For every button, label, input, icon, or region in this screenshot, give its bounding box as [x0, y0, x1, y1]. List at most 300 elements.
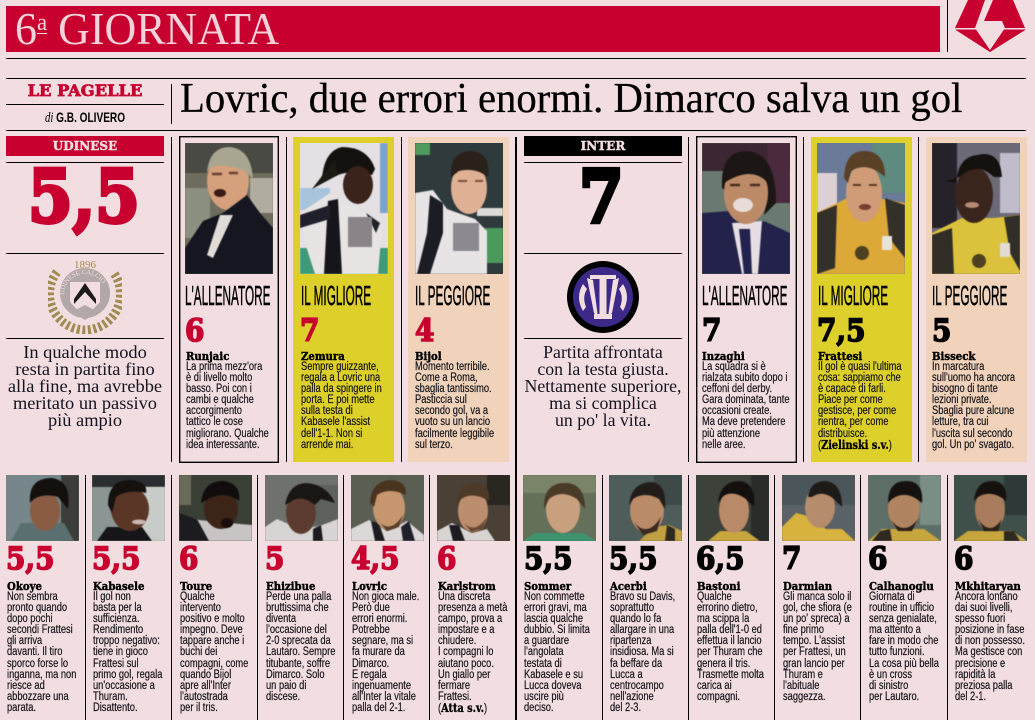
comment: accorgimento — [186, 405, 241, 417]
player: Acerbi — [609, 475, 683, 720]
comment: di sinistro — [868, 680, 908, 692]
score: 7,5 — [817, 313, 866, 349]
name: Frattesi — [818, 349, 862, 363]
team comment: alla fine, ma avrebbe — [8, 376, 162, 396]
comment: Ma deve pretendere — [702, 416, 785, 428]
name: Lovric — [352, 579, 387, 593]
icon: inter crest — [567, 261, 639, 333]
comment: rapidità la — [954, 669, 995, 681]
comment: per Frattesi, un — [782, 646, 845, 658]
name: Inzaghi — [702, 349, 745, 363]
comment: I compagni lo — [438, 646, 493, 658]
comment: l'occasione del — [266, 624, 326, 636]
photo — [609, 475, 682, 541]
comment: Potrebbe — [352, 624, 389, 636]
player: Sommer — [523, 475, 597, 720]
comment: compagni, come — [180, 658, 248, 670]
team score: 5,5 — [28, 154, 140, 240]
score: 4,5 — [351, 541, 400, 577]
comment — [186, 361, 268, 451]
comment: effettua il lancio — [696, 635, 761, 647]
comment: ma attento a — [868, 624, 920, 636]
score: 5,5 — [524, 541, 572, 577]
team name bar — [6, 136, 164, 156]
comment — [954, 592, 1024, 703]
comment: idea interessante. — [186, 439, 259, 451]
comment — [702, 361, 790, 451]
name: Bisseck — [932, 349, 975, 363]
comment: sporco forse lo — [6, 658, 68, 670]
comment: Ma gestisce con — [954, 646, 1022, 658]
heading: IL MIGLIORE — [818, 280, 888, 311]
comment: fine primo — [782, 624, 823, 636]
photo: Bisseck — [932, 143, 1020, 274]
comment: distribuisce. — [818, 428, 867, 440]
comment: positivo e molto — [180, 613, 244, 625]
comment: fare in modo che — [868, 635, 938, 647]
name: Bijol — [415, 349, 442, 363]
comment: occasioni create. — [702, 405, 772, 417]
player: Okoye — [6, 475, 79, 714]
score: 6 — [868, 541, 887, 577]
score: 4 — [415, 313, 434, 349]
comment: Kabasele l'assist — [300, 416, 370, 428]
comment: palla dell'1-0 ed — [696, 624, 761, 636]
player: Bastoni — [696, 475, 770, 720]
score: 7 — [300, 313, 319, 349]
comment: In marcatura — [932, 361, 984, 373]
comment: sbaglia tantissimo. — [415, 383, 492, 395]
comment — [696, 592, 763, 703]
score: 7 — [782, 541, 801, 577]
comment: gli arriva — [6, 635, 42, 647]
comment: secondi Frattesi — [6, 624, 72, 636]
comment: Gara dominata, tante — [702, 394, 790, 406]
comment: vuoto su un lancio — [415, 416, 490, 428]
icon: gazzetta logo — [955, 0, 1026, 52]
comment: testata di — [524, 658, 562, 670]
heading: IL PEGGIORE — [932, 280, 1007, 311]
comment: Kabasele e su — [524, 669, 583, 681]
comment: un po' spreca) a — [782, 613, 849, 625]
comment: Una discreta — [438, 591, 490, 603]
photo: Frattesi — [817, 143, 905, 274]
section label: le pagelle — [6, 81, 164, 126]
comment: tempo. L'assist — [782, 635, 844, 647]
comment: Non sembra — [6, 591, 57, 603]
headline: Lovric, due errori enormi. Dimarco salva un gol — [180, 76, 962, 122]
comment: cambi e qualche — [186, 394, 253, 406]
comment: l'autostrada — [180, 691, 227, 703]
comment: regala a Lovric una — [300, 372, 380, 384]
player: Darmian — [782, 475, 856, 720]
comment — [868, 592, 938, 703]
comment: è capace di farli. — [818, 383, 885, 395]
comment — [610, 592, 675, 714]
comment: Sbaglia pure alcune — [932, 405, 1014, 417]
comment: facilmente leggibile — [415, 428, 494, 440]
comment: sul terzo. — [415, 439, 453, 451]
photo — [179, 475, 252, 541]
comment: spesso fuori — [954, 613, 1005, 625]
comment: ceffoni del derby. — [702, 383, 772, 395]
player: Lovric — [351, 475, 424, 714]
comment: fa murare da — [352, 646, 404, 658]
photo: Bijol — [415, 143, 503, 274]
comment: Ancora lontano — [954, 591, 1017, 603]
name: Kabasele — [92, 579, 144, 593]
team comment: resta in partita fino — [15, 359, 155, 379]
comment — [782, 592, 851, 703]
comment: quando Bijol — [180, 669, 231, 681]
comment: a guardare — [524, 635, 569, 647]
comment: Lautaro. Sempre — [266, 646, 335, 658]
team comment: con la testa giusta. — [537, 359, 669, 379]
comment: basso. Poi con i — [186, 383, 251, 395]
player: Kabasele — [92, 475, 165, 714]
comment — [932, 361, 1016, 451]
comment: ma scippa la — [696, 613, 749, 625]
comment — [6, 591, 76, 714]
comment: porta. E poi mette — [300, 394, 374, 406]
comment: all'Inter la vitale — [352, 691, 415, 703]
name: Toure — [180, 579, 212, 593]
comment: Piace per come — [818, 394, 882, 406]
comment: gran lancio per — [782, 658, 844, 670]
player: Mkhitaryan — [954, 475, 1028, 720]
comment: rialzata subito dopo i — [702, 372, 787, 384]
comment: davanti. Il tiro — [6, 646, 62, 658]
comment: del 2-1. — [954, 691, 986, 703]
comment: Pasticcia sul — [415, 394, 467, 406]
comment: palla da spingere in — [300, 383, 381, 395]
score: 5,5 — [6, 541, 55, 577]
header banner — [6, 6, 940, 52]
comment: impostare e a — [438, 624, 494, 636]
photo — [6, 475, 79, 541]
heading: IL PEGGIORE — [415, 280, 490, 311]
comment — [180, 591, 248, 714]
comment: precisione e — [954, 658, 1005, 670]
comment: lezioni private. — [932, 394, 992, 406]
comment: del 2-3. — [610, 702, 641, 714]
panel: udinese team — [6, 136, 164, 430]
comment: Rendimento — [92, 624, 143, 636]
comment: fermare — [438, 680, 470, 692]
comment: presenza a metà — [438, 602, 507, 614]
comment: Lucca doveva — [524, 680, 581, 692]
comment: discese. — [266, 691, 300, 703]
comment: gol. Un po' svagato. — [932, 439, 1014, 451]
label text: LE PAGELLE — [28, 81, 142, 100]
team comment: Partita affrontata — [543, 342, 663, 362]
photo — [265, 475, 338, 541]
score: 6 — [179, 541, 198, 577]
comment: centrocampo — [610, 680, 663, 692]
comment: dubbio. Si limita — [524, 624, 590, 636]
comment: tiene in gioco — [92, 646, 147, 658]
comment: arrende mai. — [300, 439, 353, 451]
comment — [415, 361, 494, 451]
comment: E regala — [352, 669, 386, 681]
comment: La squadra si è — [702, 361, 766, 373]
icon: udinese crest — [48, 260, 122, 334]
comment: per Thuram che — [696, 646, 762, 658]
comment: routine in ufficio — [868, 602, 934, 614]
comment: deciso. — [524, 702, 554, 714]
comment: abbozzare una — [6, 691, 68, 703]
team comment — [8, 342, 162, 430]
name: Zemura — [300, 349, 344, 363]
comment: campo, prova a — [438, 613, 502, 625]
team name bar: UDINESE — [53, 139, 117, 153]
comment: un paio di — [266, 680, 306, 692]
comment: fa beffare da — [610, 658, 662, 670]
panel: inter team — [524, 136, 682, 430]
name: Darmian — [782, 579, 832, 593]
photo — [954, 475, 1027, 541]
name: Acerbi — [610, 579, 646, 593]
comment: aiutano poco. — [438, 658, 493, 670]
photo — [437, 475, 510, 541]
panel: inter peggiore — [926, 137, 1027, 462]
photo — [868, 475, 941, 541]
comment: Trasmette molta — [696, 669, 763, 681]
comment — [266, 591, 336, 703]
comment: lascia qualche — [524, 613, 583, 625]
panel: udinese migliore — [293, 137, 394, 462]
name: Okoye — [6, 579, 41, 593]
comment: letture, tra cui — [932, 416, 988, 428]
comment — [524, 592, 590, 714]
comment: per il tris. — [180, 702, 217, 714]
score: 5,5 — [609, 541, 658, 577]
team comment: un po' la vita. — [555, 410, 651, 430]
comment: inganna, ma non — [6, 669, 76, 681]
comment: gestisce, per come — [818, 405, 896, 417]
comment — [92, 591, 162, 714]
comment: dai suoi livelli, — [954, 602, 1012, 614]
comment: (Zielinski s.v.) — [818, 438, 891, 452]
score: 6 — [954, 541, 973, 577]
comment — [818, 361, 902, 452]
score: 6 — [437, 541, 456, 577]
comment — [352, 591, 419, 714]
team comment: In qualche modo — [23, 342, 147, 362]
player: Calhanoglu — [868, 475, 942, 720]
comment: per Lautaro. — [868, 691, 919, 703]
comment: Il gol è quasi l'ultima — [818, 361, 901, 373]
comment: Thuram e — [782, 669, 822, 681]
heading: IL MIGLIORE — [300, 280, 371, 311]
team comment: Nettamente superiore, — [524, 376, 682, 396]
comment: 2-0 sprecata da — [266, 635, 330, 647]
comment: Qualche — [696, 591, 731, 603]
name: Calhanoglu — [868, 579, 933, 593]
score: 5 — [265, 541, 284, 577]
panel: udinese peggiore — [408, 137, 509, 462]
photo — [696, 475, 769, 541]
comment — [300, 361, 382, 451]
comment: di non possesso. — [954, 635, 1024, 647]
comment: Perde una palla — [266, 591, 331, 603]
player: Karlstrom — [437, 475, 510, 715]
comment: insidiosa. Ma si — [610, 646, 673, 658]
comment: errori enormi. — [352, 613, 407, 625]
score: 5 — [932, 313, 951, 349]
comment: è un cross — [868, 669, 911, 681]
comment: compagni. — [696, 691, 739, 703]
comment: impegno. Deve — [180, 624, 242, 636]
comment: saggezza. — [782, 691, 825, 703]
comment: quando lo fa — [610, 613, 661, 625]
comment: dopo pochi — [6, 613, 52, 625]
comment: soprattutto — [610, 602, 654, 614]
panel: inter allenatore — [696, 136, 797, 463]
comment: sulla testa di — [300, 405, 352, 417]
comment: Thuram. — [92, 691, 127, 703]
name: Runjaic — [186, 349, 229, 363]
comment: migliorano. Qualche — [186, 428, 268, 440]
comment: senza genialate, — [868, 613, 936, 625]
score: 7 — [702, 313, 721, 349]
comment: basta per la — [92, 602, 141, 614]
comment: La cosa più bella — [868, 658, 938, 670]
comment: titubante, soffre — [266, 658, 330, 670]
score: 5,5 — [92, 541, 141, 577]
name: Sommer — [524, 579, 571, 593]
comment: Un giallo per — [438, 669, 490, 681]
comment: più attenzione — [702, 428, 760, 440]
comment: Lucca a — [610, 669, 642, 681]
comment: Frattesi. — [438, 691, 471, 703]
photo — [523, 475, 596, 541]
comment: dell'1-1. Non si — [300, 428, 362, 440]
name: Karlstrom — [438, 579, 495, 593]
photo — [351, 475, 424, 541]
byline: di G.B. OLIVERO — [45, 109, 125, 126]
comment: gol, che sfiora (e — [782, 602, 851, 614]
comment: errori gravi, ma — [524, 602, 587, 614]
comment: Bravo su Davis, — [610, 591, 675, 603]
comment: riesce ad — [6, 680, 44, 692]
team name bar — [524, 136, 682, 156]
panel: udinese allenatore — [179, 136, 279, 463]
comment: posizione in fase — [954, 624, 1024, 636]
comment: secondo gol, va a — [415, 405, 488, 417]
photo: Zemura — [300, 143, 388, 274]
comment: palla del 2-1. — [352, 702, 405, 714]
photo — [782, 475, 855, 541]
comment: Come a Roma, — [415, 372, 478, 384]
comment: Non gioca male. — [352, 591, 419, 603]
comment: è di livello molto — [186, 372, 252, 384]
comment: Il gol non — [92, 591, 130, 603]
comment: tattico le cose — [186, 416, 242, 428]
comment: l'uscita sul secondo — [932, 428, 1012, 440]
comment: Dimarco. Solo — [266, 669, 324, 681]
comment: apre all'Inter — [180, 680, 230, 692]
comment: (Atta s.v.) — [438, 701, 487, 715]
comment: preziosa palla — [954, 680, 1012, 692]
team comment: più ampio — [48, 410, 122, 430]
comment: Sempre guizzante, — [300, 361, 378, 373]
comment: tappare anche i — [180, 635, 244, 647]
score: 6 — [185, 313, 204, 349]
comment: tutto funzioni. — [868, 646, 924, 658]
team comment — [524, 342, 682, 430]
comment: Però due — [352, 602, 389, 614]
comment: sufficienza. — [92, 613, 139, 625]
comment: pronto quando — [6, 602, 67, 614]
comment: un'occasione a — [92, 680, 154, 692]
photo: Runjaic — [185, 143, 273, 274]
comment: l'abituale — [782, 680, 819, 692]
panel: inter migliore — [811, 137, 912, 462]
team comment: ma si complica — [549, 393, 657, 413]
photo — [92, 475, 165, 541]
team score: 7 — [579, 154, 624, 240]
comment: troppo negativo: — [92, 635, 159, 647]
comment: sull'uomo ha ancora — [932, 372, 1015, 384]
comment: cosa: sappiamo che — [818, 372, 900, 384]
comment: Disattento. — [92, 702, 137, 714]
comment: Momento terribile. — [415, 361, 490, 373]
heading: L'ALLENATORE — [185, 280, 270, 311]
comment: intervento — [180, 602, 220, 614]
comment: parata. — [6, 702, 36, 714]
name: Bastoni — [696, 579, 740, 593]
score: 6,5 — [696, 541, 745, 577]
comment: carica ai — [696, 680, 731, 692]
team name bar: INTER — [581, 139, 625, 153]
comment: chiudere. — [438, 635, 476, 647]
comment: buchi dei — [180, 646, 217, 658]
comment: nell'azione — [610, 691, 653, 703]
player: Toure — [179, 475, 252, 714]
comment: ripartenza — [610, 635, 651, 647]
team comment: meritato un passivo — [13, 393, 157, 413]
comment: Frattesi sul — [92, 658, 138, 670]
comment: Giornata di — [868, 591, 914, 603]
comment: Gli manca solo il — [782, 591, 851, 603]
heading: L'ALLENATORE — [702, 280, 787, 311]
comment: allargare in una — [610, 624, 674, 636]
name: Ehizibue — [266, 579, 315, 593]
comment: Non commette — [524, 591, 585, 603]
player: Ehizibue — [265, 475, 338, 703]
comment: bisogno di tante — [932, 383, 998, 395]
comment: diventa — [266, 613, 296, 625]
comment: Qualche — [180, 591, 214, 603]
comment: nelle aree. — [702, 439, 746, 451]
photo: Inzaghi — [702, 143, 790, 274]
comment: ingenuamente — [352, 680, 411, 692]
comment — [438, 591, 508, 715]
comment: bruttissima che — [266, 602, 328, 614]
comment: Dimarco. — [352, 658, 389, 670]
comment: genera il tris. — [696, 658, 750, 670]
name: Mkhitaryan — [954, 579, 1020, 593]
title: 6a giornata: 6a GIORNATA — [15, 3, 279, 54]
comment: segnare, ma si — [352, 635, 413, 647]
comment: primo gol, regala — [92, 669, 162, 681]
comment: l'angolata — [524, 646, 564, 658]
comment: errorino dietro, — [696, 602, 757, 614]
comment: rientra, per come — [818, 416, 888, 428]
comment: uscire più — [524, 691, 564, 703]
comment: La prima mezz'ora — [186, 361, 262, 373]
